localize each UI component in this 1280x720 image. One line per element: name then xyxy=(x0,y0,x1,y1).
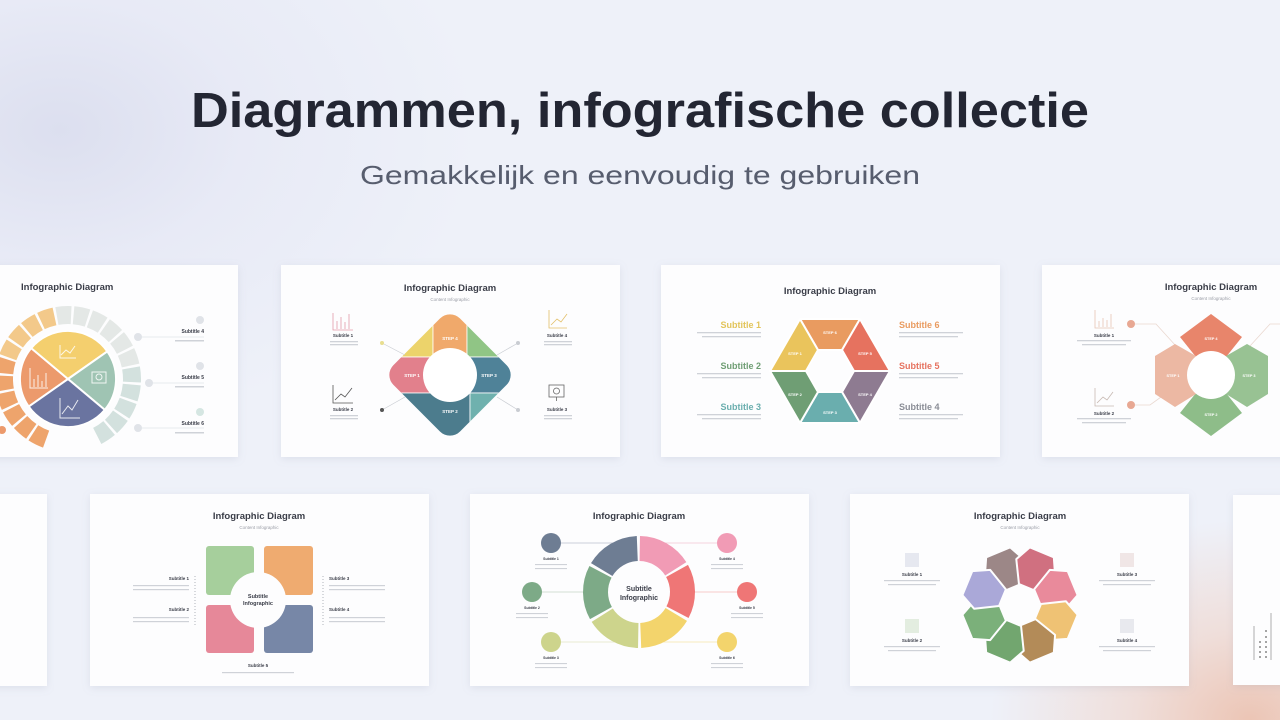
card F: ring: Infographic xyxy=(620,595,658,602)
card C: hexagon xyxy=(661,265,1000,457)
side labels: Subtitle 1 xyxy=(333,333,354,338)
card D: diamonds and hexagons: STEP 2 xyxy=(1204,413,1218,417)
card B: rounded diamond: STEP 1 xyxy=(404,373,420,378)
card G: petals: Infographic Diagram xyxy=(974,511,1066,522)
card E: four squares xyxy=(90,494,429,686)
labels: Subtitle 2 xyxy=(169,607,189,612)
hex labels xyxy=(720,320,940,412)
card B: rounded diamond: Content Infographic xyxy=(430,297,470,302)
hex labels: Subtitle 6 xyxy=(899,320,940,330)
pie xyxy=(20,331,116,427)
hex labels: Subtitle 2 xyxy=(720,361,761,371)
hex labels: Subtitle 1 xyxy=(720,320,761,330)
card E: four squares: Content Infographic xyxy=(239,525,279,530)
card A: semicircle diagram xyxy=(0,265,238,461)
card G: petals: Subtitle 2 xyxy=(902,638,923,643)
card B: rounded diamond: STEP 2 xyxy=(442,409,458,414)
hex labels: Subtitle 3 xyxy=(720,402,761,412)
ring segments xyxy=(0,297,150,461)
card F: ring xyxy=(470,494,809,686)
title: Diagrammen, infografische collectie xyxy=(191,84,1089,138)
card C: hexagon: STEP 1 xyxy=(788,351,803,356)
labels: Subtitle 4 xyxy=(329,607,350,612)
card G: petals xyxy=(850,494,1189,686)
card C: hexagon: STEP 5 xyxy=(858,351,873,356)
card F: ring: Subtitle xyxy=(626,586,652,593)
hex segments xyxy=(770,319,890,423)
card F: ring: Infographic Diagram xyxy=(593,511,685,522)
labels xyxy=(169,576,350,668)
card G: petals: Subtitle 4 xyxy=(1117,638,1138,643)
connectors xyxy=(532,543,747,642)
card F: ring: Subtitle 2 xyxy=(524,606,540,610)
card D: diamonds and hexagons: STEP 1 xyxy=(1166,374,1180,378)
labels right: Subtitle 4 xyxy=(181,329,204,335)
squares xyxy=(206,546,254,595)
subtitle: Gemakkelijk en eenvoudig te gebruiken xyxy=(360,160,920,190)
card A: semicircle diagram: Infographic Diagram xyxy=(21,282,113,293)
card F: ring: Subtitle 3 xyxy=(543,656,559,660)
left labels: Subtitle 2 xyxy=(1094,411,1115,416)
labels right xyxy=(134,316,204,434)
labels right: Subtitle 5 xyxy=(181,375,204,381)
card C: hexagon: STEP 3 xyxy=(823,410,838,415)
card C: hexagon: STEP 6 xyxy=(823,330,838,335)
card B: rounded diamond xyxy=(281,265,620,457)
hex labels: Subtitle 5 xyxy=(899,361,940,371)
labels: Subtitle 3 xyxy=(329,576,350,581)
card B: rounded diamond: STEP 4 xyxy=(442,336,458,341)
card C: hexagon: STEP 2 xyxy=(788,392,803,397)
card D: diamonds and hexagons: Infographic Diagram xyxy=(1165,282,1257,293)
card B: rounded diamond: Infographic Diagram xyxy=(404,283,496,294)
left labels xyxy=(1077,310,1131,423)
card C: hexagon: STEP 4 xyxy=(858,392,873,397)
card D: diamonds and hexagons xyxy=(1042,265,1280,457)
diamond segments xyxy=(389,314,511,436)
left labels: Subtitle 1 xyxy=(1094,333,1115,338)
side labels: Subtitle 4 xyxy=(547,333,568,338)
labels: Subtitle 1 xyxy=(169,576,189,581)
side labels: Subtitle 2 xyxy=(333,407,354,412)
circles xyxy=(541,533,561,553)
card B: rounded diamond: STEP 3 xyxy=(481,373,497,378)
petals xyxy=(959,544,1081,666)
card F: ring: Subtitle 6 xyxy=(719,656,735,660)
card D: diamonds and hexagons: Content Infographic xyxy=(1191,296,1231,301)
card G: petals: Content Infographic xyxy=(1000,525,1040,530)
card C: hexagon: Infographic Diagram xyxy=(784,286,876,297)
card F: ring: Subtitle 5 xyxy=(739,606,755,610)
labels right: Subtitle 6 xyxy=(181,421,204,427)
connectors xyxy=(380,341,520,412)
card E: four squares: Infographic xyxy=(243,601,273,607)
hex labels: Subtitle 4 xyxy=(899,402,940,412)
side labels xyxy=(330,310,572,419)
card D: diamonds and hexagons: STEP 3 xyxy=(1242,374,1256,378)
side labels: Subtitle 3 xyxy=(547,407,568,412)
connectors xyxy=(1131,324,1280,405)
card E: four squares: Infographic Diagram xyxy=(213,511,305,522)
card G: petals: Subtitle 1 xyxy=(902,572,923,577)
card G: petals: Subtitle 3 xyxy=(1117,572,1138,577)
shapes xyxy=(1180,314,1242,357)
ring segments xyxy=(579,532,699,652)
card D: diamonds and hexagons: STEP 4 xyxy=(1204,337,1218,341)
card: right partial row 2 xyxy=(1233,495,1280,685)
card F: ring: Subtitle 1 xyxy=(543,557,559,561)
card: left partial row 2 xyxy=(0,494,47,686)
card F: ring: Subtitle 4 xyxy=(719,557,735,561)
labels: Subtitle 5 xyxy=(248,663,269,668)
card E: four squares: Subtitle xyxy=(248,594,268,600)
